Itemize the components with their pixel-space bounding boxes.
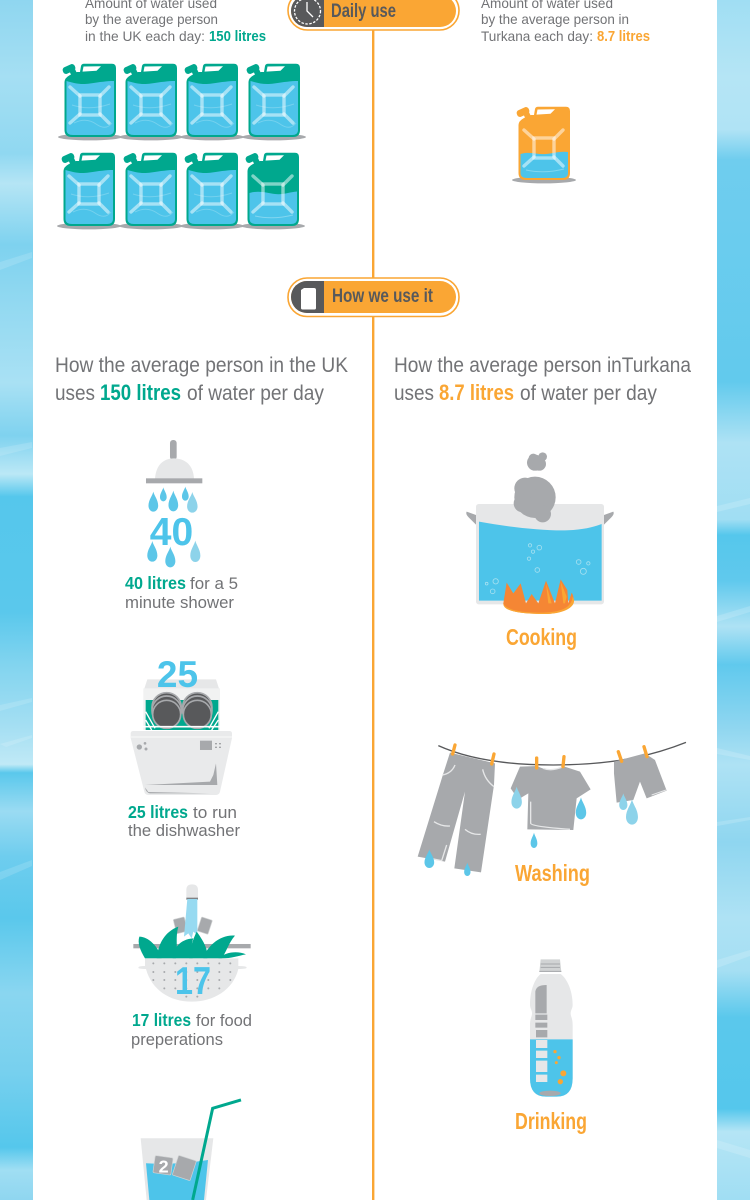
- number: 40: 40: [150, 511, 193, 554]
- caption: shower: 40 litres: [125, 573, 186, 593]
- heading: Turkana usage: 8.7 litres: [439, 380, 514, 405]
- heading: UK usage: uses: [55, 382, 95, 405]
- icon: jerry can: [301, 288, 316, 310]
- heading: Turkana usage: How the average person inTurkana: [394, 354, 691, 377]
- caption: cooking: Cooking: [506, 624, 577, 650]
- badge: how we use it: How we use it: [332, 286, 434, 307]
- item: cooking: [466, 452, 614, 650]
- heading: Turkana usage: [394, 354, 691, 405]
- caption: drinking: Drinking: [515, 1108, 587, 1134]
- heading: Turkana usage: of water per day: [520, 382, 657, 405]
- icon: glass with ice and straw: 2: [159, 1156, 169, 1176]
- text: UK daily amount: in the UK each day:: [85, 28, 205, 44]
- caption: dishwasher: the dishwasher: [128, 821, 240, 840]
- background: water texture right strip: [717, 0, 750, 1200]
- text: Turkana daily amount: by the average person in: [481, 11, 629, 27]
- jerry can: partly full: [241, 152, 305, 229]
- caption: dishwasher: 25 litres: [128, 802, 188, 822]
- text: Turkana daily amount: [481, 0, 650, 45]
- icon: shower head with drops: [146, 440, 202, 567]
- text: Turkana daily amount: 8.7 litres: [597, 28, 650, 45]
- text: Turkana daily amount: Turkana each day:: [481, 28, 593, 44]
- item: food preparation: [131, 884, 252, 1049]
- background: water texture left strip: [0, 0, 33, 1200]
- text: UK daily amount: 150 litres: [209, 28, 266, 45]
- text: UK daily amount: by the average person: [85, 11, 218, 27]
- icon: boiling pot on fire: [466, 452, 614, 614]
- item: drinking glass: [141, 1100, 241, 1200]
- icon: colander under tap: [133, 884, 251, 1002]
- caption: dishwasher: [128, 802, 240, 840]
- number: 17: 17: [175, 960, 211, 1003]
- item: shower: [125, 440, 238, 612]
- caption: shower: [125, 573, 238, 612]
- caption: washing: Washing: [515, 860, 590, 886]
- badge: how we use it: [288, 278, 459, 316]
- item: washing: [418, 742, 686, 886]
- icon: dishwasher: [131, 679, 232, 795]
- text: UK daily amount: [85, 0, 266, 45]
- caption: shower: for a 5: [190, 574, 238, 593]
- caption: food preparation: [131, 1010, 252, 1049]
- jerry can: Turkana daily use: [512, 106, 576, 183]
- number: 25: 25: [157, 654, 198, 695]
- icon: clock: [294, 0, 320, 24]
- central divider line: [372, 28, 374, 1200]
- caption: food preparation: for food: [196, 1011, 252, 1030]
- caption: dishwasher: to run: [193, 803, 237, 822]
- caption: shower: minute shower: [125, 593, 234, 612]
- badge: daily use: Daily use: [331, 1, 396, 22]
- caption: food preparation: 17 litres: [132, 1010, 191, 1030]
- item: drinking: [515, 959, 587, 1134]
- heading: UK usage: How the average person in the UK: [55, 354, 348, 377]
- heading: Turkana usage: uses: [394, 382, 434, 405]
- icon: water bottle: [530, 959, 573, 1097]
- item: dishwasher: [128, 654, 240, 840]
- icon: clothes on a washing line: [418, 742, 686, 876]
- heading: UK usage: [55, 354, 348, 405]
- caption: food preparation: preperations: [131, 1030, 223, 1049]
- badge: daily use: [288, 0, 459, 30]
- heading: UK usage: 150 litres: [100, 380, 181, 405]
- jerry cans: UK daily use: [57, 63, 306, 229]
- heading: UK usage: of water per day: [187, 382, 324, 405]
